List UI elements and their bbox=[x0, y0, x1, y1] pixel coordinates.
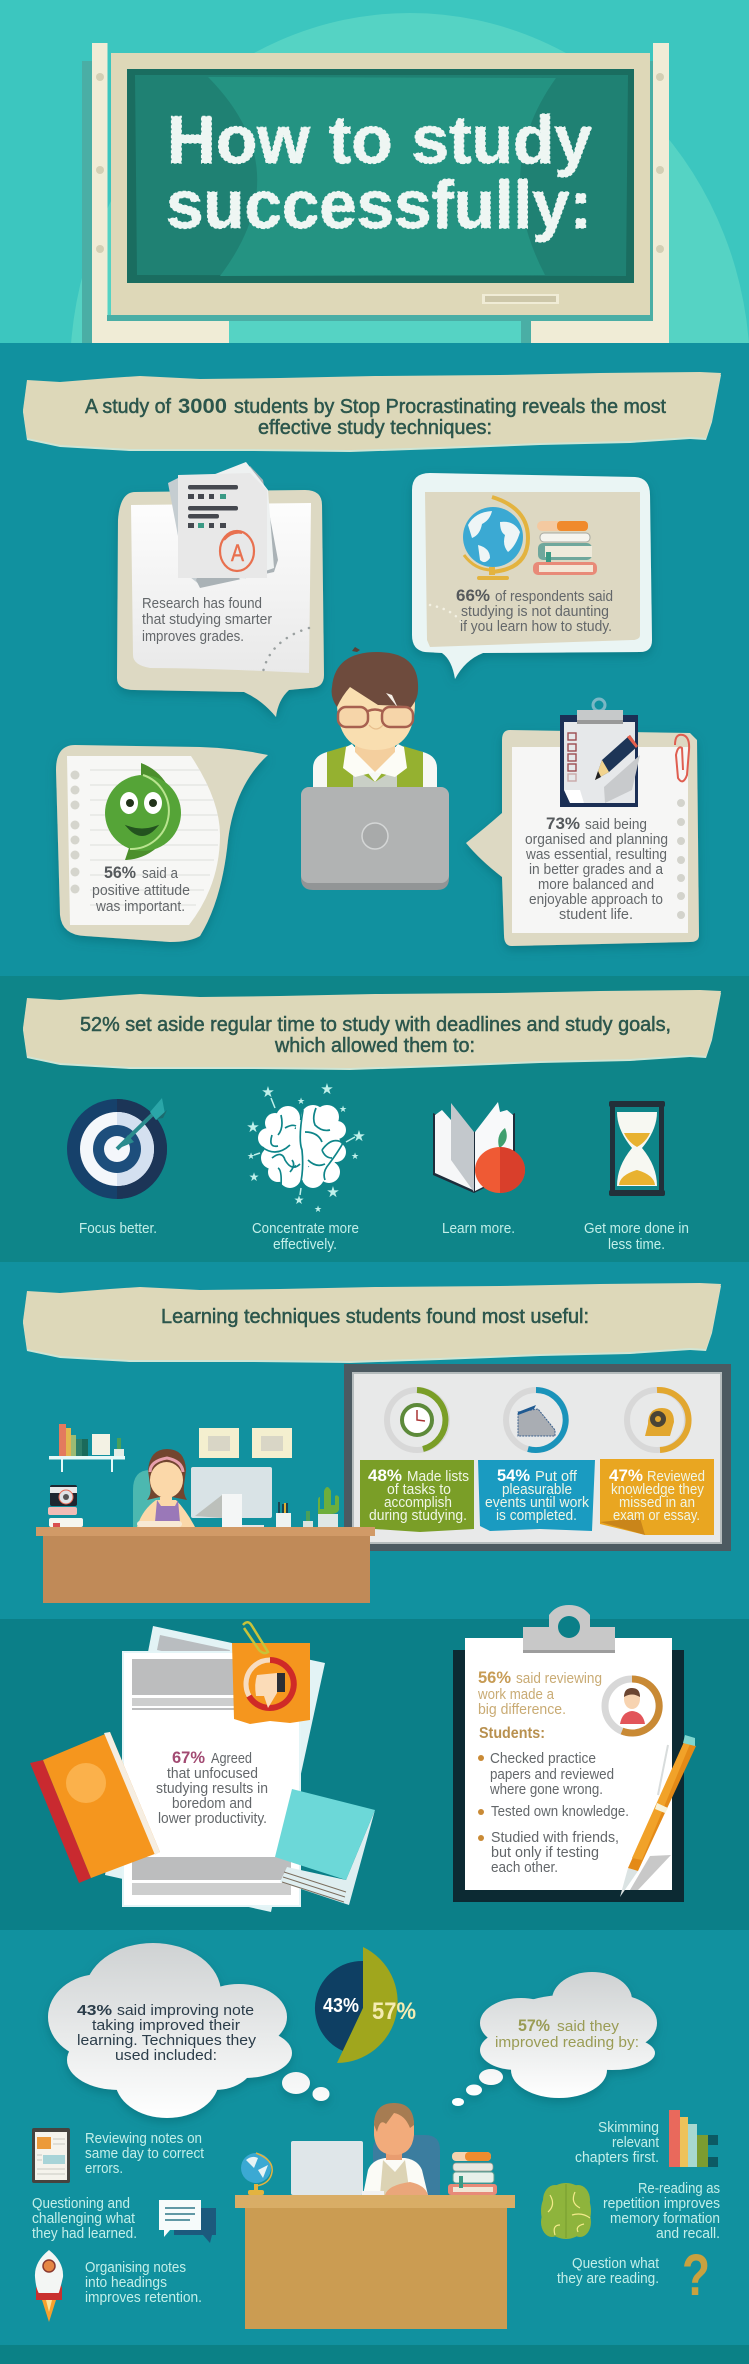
text: research: that studying smarter bbox=[142, 611, 272, 628]
icon: brain with stars: ★ bbox=[297, 1096, 305, 1106]
banner: study of 3000 students: 3000 bbox=[178, 395, 227, 418]
icon: desk items bbox=[276, 1487, 339, 1527]
banner: study of 3000 students: A study of bbox=[85, 396, 171, 418]
title: How to study bbox=[167, 102, 592, 178]
icon: globe bbox=[241, 2153, 272, 2195]
text: 56% reviewing: said reviewing bbox=[516, 1670, 602, 1687]
panel: 48% green bbox=[360, 1460, 474, 1532]
text: students list: each other. bbox=[491, 1859, 558, 1876]
text: questioning: they had learned. bbox=[32, 2225, 137, 2242]
panel: 54% blue bbox=[478, 1460, 595, 1531]
text: students list: where gone wrong. bbox=[489, 1781, 603, 1798]
icon: books row bbox=[669, 2110, 718, 2167]
desk: boy bbox=[235, 2195, 515, 2329]
text: re-reading: and recall. bbox=[656, 2225, 720, 2242]
icon: target bbox=[67, 1098, 167, 1199]
icon: orange note with thumb down bbox=[232, 1622, 310, 1724]
icon: brain with stars: ★ bbox=[326, 1184, 340, 1201]
text: question bbox=[557, 2255, 660, 2287]
panel: 48% green: accomplish bbox=[384, 1495, 452, 1511]
panel: 47% orange: missed in an bbox=[619, 1495, 695, 1511]
cloud: 43% note taking: 43% bbox=[77, 2002, 112, 2019]
icon: brain with stars: ★ bbox=[261, 1084, 275, 1101]
text: re-reading: memory formation bbox=[610, 2210, 720, 2227]
figure: girl at desk bbox=[48, 1424, 339, 1532]
text: 66%: if you learn how to study. bbox=[460, 618, 612, 635]
text: research: improves grades. bbox=[142, 628, 244, 645]
banner: 52% set aside time: 52% set aside regular time to study with deadlines and study goals, bbox=[80, 1014, 671, 1036]
panel: 54% blue: events until work bbox=[485, 1495, 590, 1511]
chart: 47% donut bbox=[627, 1390, 689, 1450]
text: questioning bbox=[32, 2195, 137, 2242]
panel: 47% orange bbox=[600, 1459, 714, 1535]
text: 66%: 66% bbox=[456, 586, 490, 605]
labels: benefits: Learn more. bbox=[442, 1220, 515, 1237]
icon: brain with stars: ★ bbox=[320, 1081, 334, 1098]
cloud: 57% reading: said they bbox=[557, 2018, 620, 2035]
icon: shelf bbox=[49, 1424, 125, 1472]
text: 67%: lower productivity. bbox=[158, 1810, 267, 1827]
text: 56% reviewing bbox=[477, 1668, 602, 1742]
icon: globe bbox=[463, 497, 528, 580]
panel: 47% orange: exam or essay. bbox=[613, 1508, 700, 1524]
desk: girl bbox=[36, 1527, 375, 1603]
panel: 47% orange: Reviewed bbox=[647, 1469, 705, 1485]
panel: 48% green: 48% bbox=[368, 1466, 402, 1485]
text: 73%: more balanced and bbox=[538, 876, 654, 893]
text: 73%: in better grades and a bbox=[529, 861, 664, 878]
icon: notes clipboard bbox=[32, 2128, 70, 2183]
panel: 66% speech bubble bbox=[412, 473, 652, 679]
text: 67%: 67% bbox=[172, 1748, 205, 1767]
text: re-reading bbox=[603, 2180, 720, 2242]
text: organising notes: improves retention. bbox=[85, 2289, 202, 2306]
icon: pen bbox=[620, 1735, 696, 1897]
header chalkboard bbox=[71, 13, 749, 343]
banner: study of 3000 students: students by Stop Procrastinating reveals the most bbox=[234, 396, 666, 418]
icon: graded paper: A bbox=[231, 540, 244, 567]
text: 67%: boredom and bbox=[172, 1795, 252, 1812]
panel: 47% orange: 47% bbox=[609, 1466, 643, 1485]
cloud: 43% note taking: taking improved their bbox=[92, 2017, 240, 2034]
panel: 48% green: during studying. bbox=[369, 1508, 467, 1524]
banner: study of 3000 students: effective study techniques: bbox=[258, 417, 492, 439]
panel: wall board with techniques bbox=[344, 1364, 731, 1551]
icon: brain with stars bbox=[246, 1081, 366, 1214]
labels: benefits bbox=[79, 1220, 689, 1253]
banner: study of 3000 students bbox=[23, 372, 721, 452]
chart: 56% donut bbox=[605, 1679, 659, 1733]
panel: 48% green: of tasks to bbox=[387, 1482, 451, 1498]
text: questioning: challenging what bbox=[32, 2210, 136, 2227]
text: organising notes: Organising notes bbox=[85, 2259, 186, 2276]
text: research bbox=[142, 595, 272, 645]
icon: brain with stars: ★ bbox=[339, 1104, 347, 1114]
text: 73%: student life. bbox=[559, 906, 633, 923]
icon: book and apple bbox=[433, 1102, 525, 1193]
icon: paper clip bbox=[675, 735, 689, 781]
icon: green brain bbox=[541, 2183, 591, 2239]
text: students list: papers and reviewed bbox=[490, 1766, 614, 1783]
text: students list: Checked practice bbox=[490, 1750, 596, 1767]
text: question: Question what bbox=[572, 2255, 660, 2272]
chart: pie 43% and 57%: 57% bbox=[372, 1998, 416, 2025]
figure: student at laptop bbox=[301, 647, 449, 890]
icon: clipboard and pencil bbox=[560, 699, 640, 807]
title: successfully: bbox=[166, 167, 592, 243]
icon: wall frames bbox=[199, 1428, 292, 1458]
chart: pie 43% and 57%: 43% bbox=[323, 1995, 359, 2017]
labels: benefits: less time. bbox=[608, 1236, 665, 1253]
text: students list bbox=[478, 1750, 629, 1876]
labels: benefits: Get more done in bbox=[584, 1220, 689, 1237]
panel: 56% speech bubble bbox=[56, 745, 268, 942]
text: 66%: studying is not daunting bbox=[461, 603, 609, 620]
text: 73%: 73% bbox=[546, 814, 580, 833]
text: 56% reviewing: work made a bbox=[477, 1686, 555, 1703]
text: 56% reviewing: Students: bbox=[479, 1725, 545, 1742]
cloud: 43% note taking bbox=[48, 1943, 330, 2118]
icon: hourglass bbox=[609, 1101, 665, 1196]
icon: smiley chart bbox=[105, 763, 181, 860]
text: 56%: 56% bbox=[104, 863, 136, 882]
text: skimming: Skimming bbox=[598, 2119, 659, 2136]
panel: 54% blue: is completed. bbox=[496, 1508, 577, 1524]
chart: pie 43% and 57% bbox=[315, 1947, 416, 2063]
text: question: they are reading. bbox=[557, 2270, 659, 2287]
text: organising notes bbox=[85, 2259, 202, 2306]
text: 73%: organised and planning bbox=[525, 831, 668, 848]
text: 56% bbox=[92, 863, 190, 915]
icon: brain with stars: ★ bbox=[247, 1151, 255, 1161]
text: reviewing notes: Reviewing notes on bbox=[85, 2130, 202, 2147]
text: 56%: said a bbox=[142, 865, 179, 882]
text: 73% bbox=[525, 814, 668, 923]
panel: 48% green: Made lists bbox=[407, 1469, 469, 1485]
text: re-reading: repetition improves bbox=[603, 2195, 720, 2212]
text: students list: Tested own knowledge. bbox=[491, 1803, 629, 1820]
text: 67% bbox=[156, 1748, 268, 1827]
text: students list: but only if testing bbox=[491, 1844, 599, 1861]
labels: benefits: effectively. bbox=[273, 1236, 337, 1253]
text: 67%: studying results in bbox=[156, 1780, 268, 1797]
text: re-reading: Re-reading as bbox=[638, 2180, 720, 2197]
icon: board clip bbox=[523, 1605, 615, 1653]
text: skimming: chapters first. bbox=[575, 2149, 659, 2166]
chart: 48% donut bbox=[387, 1390, 447, 1450]
text: organising notes: into headings bbox=[85, 2274, 167, 2291]
labels: benefits: Concentrate more bbox=[252, 1220, 359, 1237]
icon: teal note bbox=[275, 1789, 375, 1905]
text: reviewing notes: errors. bbox=[85, 2160, 123, 2177]
icon: graded paper bbox=[168, 462, 278, 588]
text: 67%: Agreed bbox=[211, 1750, 252, 1767]
text: 73%: said being bbox=[585, 816, 647, 833]
icon: brain with stars: ★ bbox=[314, 1204, 322, 1214]
text: 56%: positive attitude bbox=[92, 882, 190, 899]
icon: brain with stars: ★ bbox=[352, 1128, 366, 1145]
labels: benefits: Focus better. bbox=[79, 1220, 157, 1237]
text: reviewing notes: same day to correct bbox=[85, 2145, 205, 2162]
text: skimming bbox=[575, 2119, 660, 2166]
icon: question mark: ? bbox=[682, 2243, 710, 2308]
banner: 52% set aside time bbox=[23, 990, 721, 1070]
panel: 73% speech bubble bbox=[466, 699, 699, 946]
text: 73%: enjoyable approach to bbox=[529, 891, 663, 908]
banner: 52% set aside time: which allowed them to: bbox=[274, 1035, 475, 1057]
text: 56%: was important. bbox=[95, 898, 185, 915]
cloud: 43% note taking: learning. Techniques they bbox=[77, 2032, 257, 2049]
text: reviewing notes bbox=[85, 2130, 205, 2177]
text: questioning: Questioning and bbox=[32, 2195, 130, 2212]
figure: boy at desk bbox=[241, 2103, 497, 2195]
cloud: 43% note taking: said improving note bbox=[117, 2002, 254, 2019]
panel: 54% blue: 54% bbox=[497, 1466, 530, 1485]
panel: 54% blue: Put off bbox=[535, 1469, 578, 1485]
icon: camera and books bbox=[48, 1485, 83, 1532]
text: skimming: relevant bbox=[612, 2134, 660, 2151]
icon: red book bbox=[30, 1732, 160, 1883]
icon: brain with stars: ★ bbox=[249, 1170, 259, 1184]
text: 73%: was essential, resulting bbox=[525, 846, 667, 863]
text: 67%: that unfocused bbox=[167, 1765, 258, 1782]
icon: stacked books bbox=[533, 521, 597, 575]
icon: book stack bbox=[448, 2152, 497, 2195]
icon: speech boxes bbox=[159, 2200, 216, 2243]
text: research: Research has found bbox=[142, 595, 262, 612]
panel: 56% clipboard bbox=[453, 1605, 696, 1902]
panel: research speech bubble bbox=[117, 462, 324, 717]
text: 56% reviewing: 56% bbox=[478, 1668, 511, 1687]
icon: rocket bbox=[35, 2250, 63, 2322]
cloud: 57% reading: 57% bbox=[518, 2016, 550, 2035]
text: 56% reviewing: big difference. bbox=[478, 1701, 566, 1718]
text: 66%: of respondents said bbox=[495, 588, 613, 605]
chart: 54% donut bbox=[506, 1390, 566, 1450]
cloud: 57% reading: improved reading by: bbox=[495, 2034, 639, 2051]
icon: brain with stars: ★ bbox=[351, 1151, 359, 1161]
title bbox=[166, 102, 592, 243]
cloud: 57% reading bbox=[452, 1972, 657, 2106]
icon: brain with stars: ★ bbox=[294, 1193, 304, 1207]
icon: brain with stars: ★ bbox=[246, 1119, 260, 1136]
panel: 54% blue: pleasurable bbox=[502, 1482, 572, 1498]
panel: 47% orange: knowledge they bbox=[611, 1482, 705, 1498]
banner: learning techniques: Learning techniques students found most useful: bbox=[161, 1306, 589, 1328]
banner: learning techniques bbox=[23, 1283, 721, 1363]
text: 66% bbox=[456, 586, 613, 635]
cloud: 43% note taking: used included: bbox=[115, 2047, 217, 2064]
panel: 67% paper stack bbox=[30, 1622, 375, 1912]
text: students list: Studied with friends, bbox=[491, 1829, 619, 1846]
